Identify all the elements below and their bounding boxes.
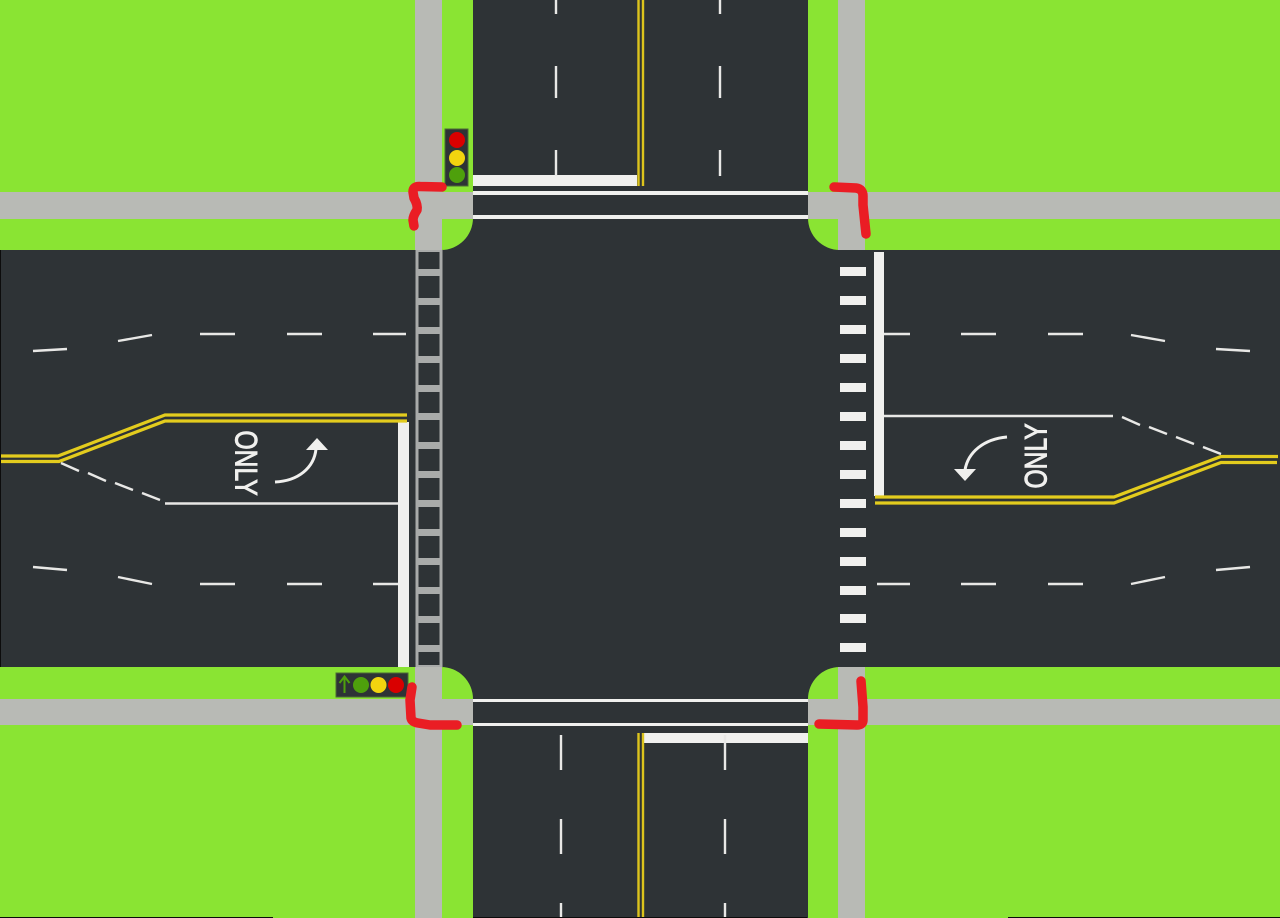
north-south double yellow centre line: [638, 0, 643, 917]
east double yellow line: [875, 456, 1278, 503]
east turn arrow: [954, 437, 1007, 481]
red corner mark: north-east: [834, 187, 866, 234]
east ONLY marking: ONLY: [1018, 423, 1053, 488]
red corner mark: north-west: [413, 186, 442, 226]
west traffic signal with arrow: [336, 673, 408, 697]
west double yellow line: [1, 415, 407, 462]
north crosswalk: [473, 191, 808, 219]
west ONLY marking: ONLY: [229, 430, 264, 496]
west turn arrow: [275, 438, 328, 482]
west turn lane line: [61, 463, 398, 504]
north traffic signal: [445, 129, 468, 186]
south crosswalk: [473, 699, 808, 726]
stop bars: [398, 175, 884, 743]
north-south lane dashes: [556, 0, 725, 917]
red corner mark: south-east: [819, 681, 863, 725]
east approach lane dashes: [877, 334, 1250, 584]
edge lines: [0, 250, 1280, 918]
west ladder crosswalk: [416, 250, 442, 667]
east turn lane line: [884, 416, 1221, 454]
red corner mark: south-west: [410, 687, 457, 725]
west approach lane dashes: [33, 334, 406, 584]
east zebra crosswalk: [840, 267, 866, 652]
